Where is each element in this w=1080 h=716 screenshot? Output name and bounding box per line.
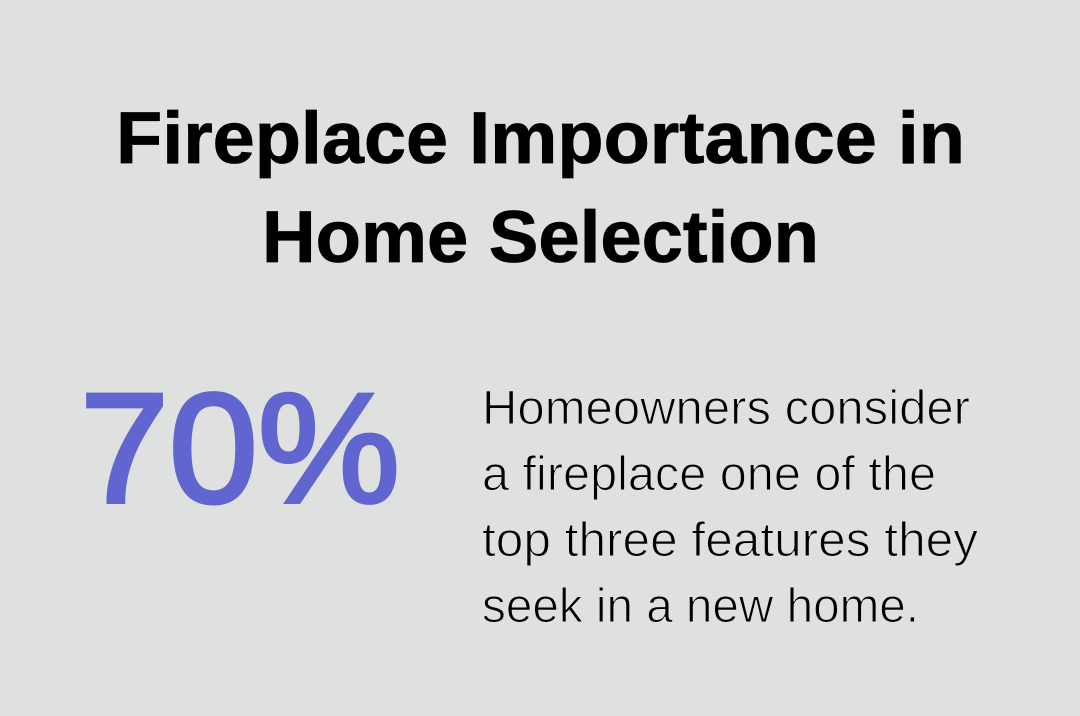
description text: a fireplace one of the — [482, 448, 936, 501]
description text: top three features they — [482, 514, 978, 567]
statistic: 70%: 70% — [80, 362, 400, 536]
title: Fireplace Importance in — [116, 98, 965, 179]
description text: Homeowners consider — [482, 382, 970, 435]
description text: seek in a new home. — [482, 580, 919, 633]
title: Home Selection — [262, 197, 819, 278]
title — [116, 98, 965, 278]
description text — [482, 382, 978, 633]
